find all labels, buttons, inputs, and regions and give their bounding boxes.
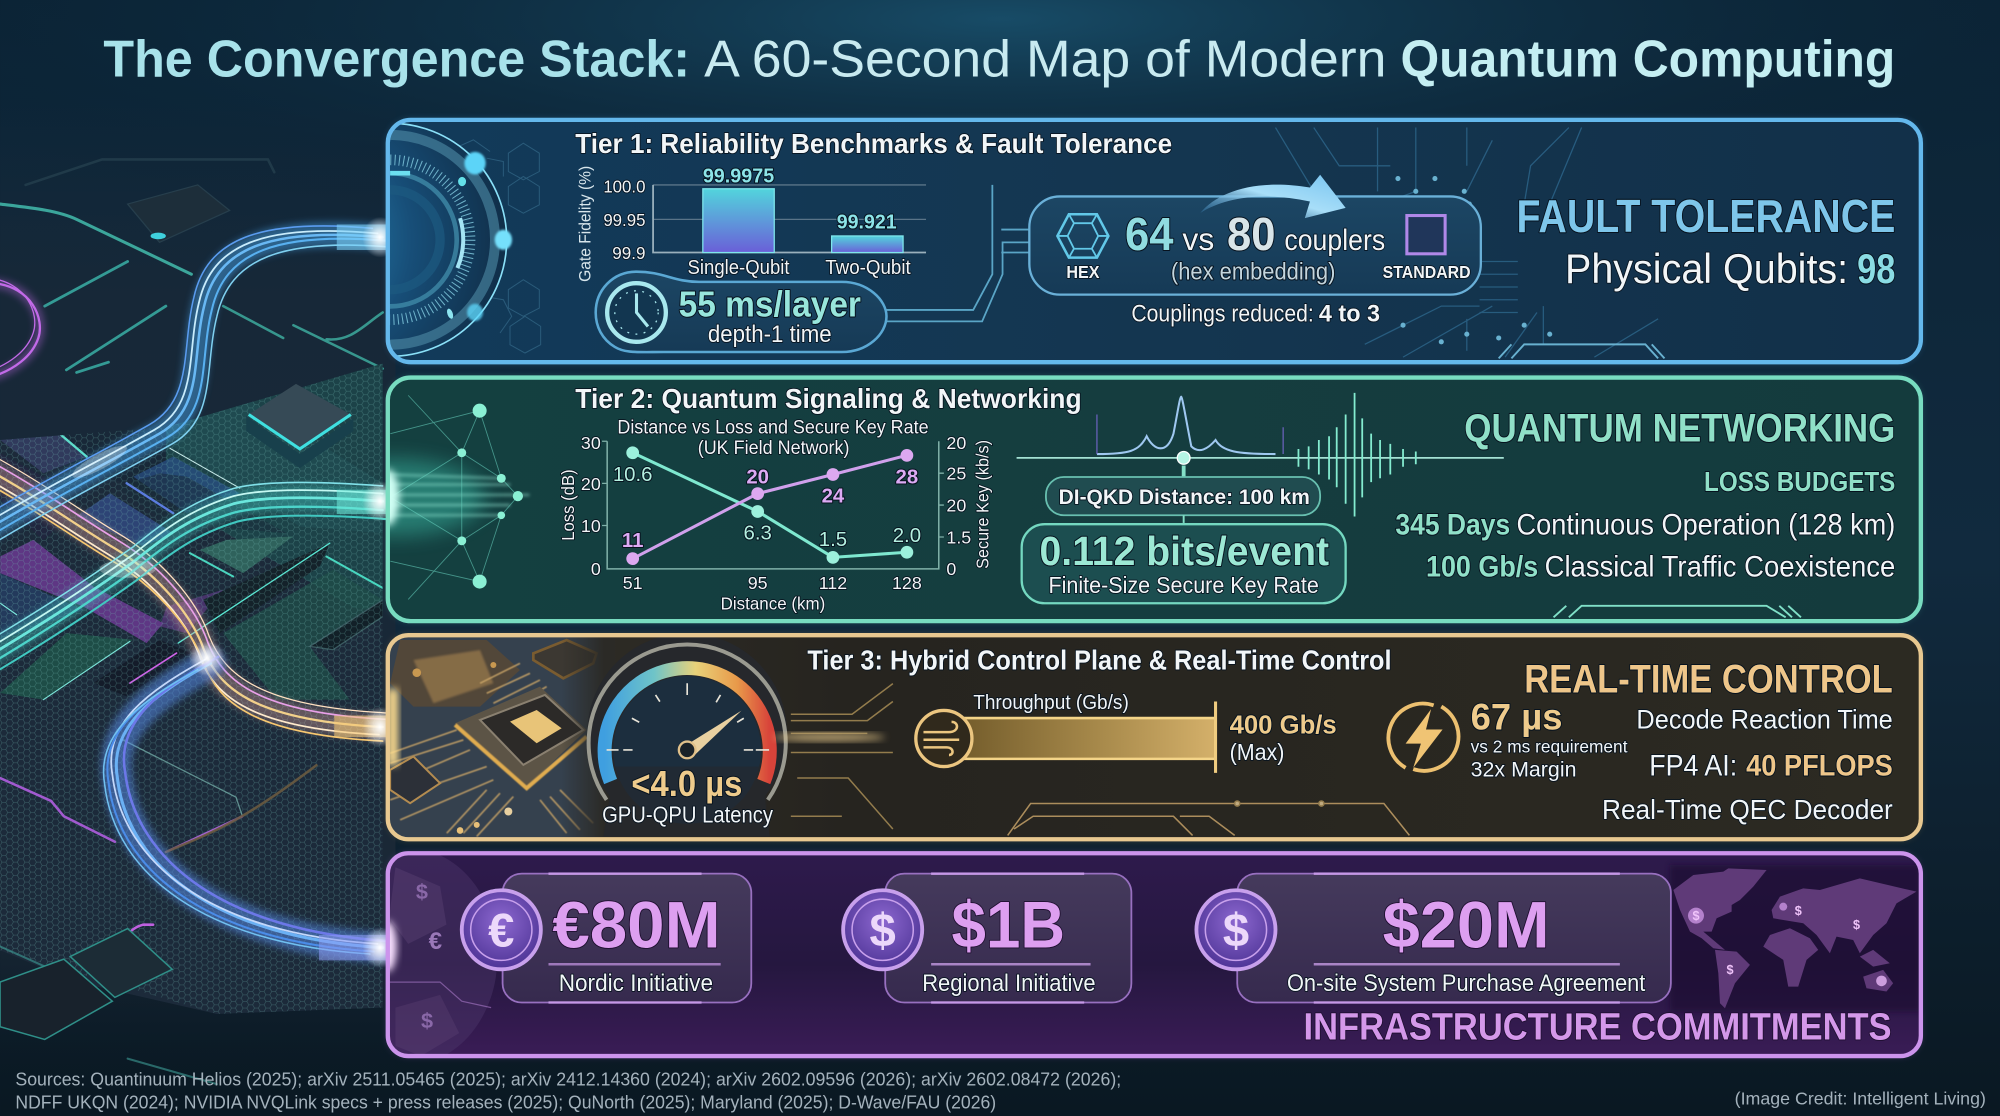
icon: hex lattice (1057, 214, 1108, 258)
chip illustration (390, 637, 598, 838)
line chart: distance vs loss and key rate: Distance (km) (721, 594, 825, 614)
waveform (1017, 393, 1504, 517)
line chart: distance vs loss and key rate: 0 (946, 559, 956, 579)
circuit connectors (886, 185, 1029, 321)
heading: Tier 3: Hybrid Control Plane & Real-Time Control (807, 645, 1392, 676)
tier 3 label: Decode Reaction Time (1636, 704, 1893, 734)
callout: couplers comparison (1029, 175, 1481, 295)
circuit board illustration (0, 159, 383, 1084)
card: regional (843, 874, 1131, 1002)
title: Quantum Computing (1400, 31, 1895, 89)
sources footer (15, 1068, 1121, 1112)
bar chart: gate fidelity: Gate Fidelity (%) (576, 166, 595, 282)
line chart: distance vs loss and key rate (558, 418, 993, 614)
callout: couplers comparison: couplers (1284, 224, 1385, 257)
tier 1 label: 98 (1857, 245, 1895, 292)
tier 3 label: REAL-TIME CONTROL (1524, 658, 1893, 702)
icon: gauge (587, 633, 787, 836)
gauge readout (602, 764, 773, 828)
line chart: distance vs loss and key rate: 20 (946, 433, 966, 453)
card: on-site: $20M (1383, 889, 1550, 963)
bar chart: gate fidelity: Two-Qubit (825, 257, 911, 279)
icon: standard square (1407, 216, 1445, 254)
decorative traces (773, 684, 1409, 835)
line chart: distance vs loss and key rate: 0 (591, 559, 601, 579)
callout: layer time: 55 ms/layer (679, 284, 861, 324)
world map: $ (1692, 909, 1700, 923)
tier 3 label (1524, 658, 1893, 825)
fiber connector tubes (319, 217, 398, 968)
card: regional: $1B (952, 889, 1065, 963)
fiber: gold to tier 3 (0, 455, 388, 741)
tier 2 label: QUANTUM NETWORKING (1464, 406, 1895, 450)
couplings note: Couplings reduced: (1131, 300, 1314, 327)
tier 3 label: FP4 AI: (1649, 749, 1737, 782)
tier 2 label: Classical Traffic Coexistence (1545, 550, 1895, 583)
globe with currency marks: € (429, 928, 443, 955)
crossing highlights (69, 441, 225, 676)
world map: $ (1853, 918, 1860, 932)
hud rings (390, 123, 542, 357)
callout: DI-QKD distance (1046, 477, 1320, 515)
gauge readout: <4.0 µs (631, 764, 742, 804)
sources footer: NDFF UKQN (2024); NVIDIA NVQLink specs + press releases (2025); QuNorth (2025); Maryland (2025); D-Wave/FAU (2026) (15, 1091, 996, 1112)
decode reaction metric: 32x Margin (1471, 757, 1576, 782)
decode reaction metric (1388, 697, 1628, 782)
line chart: distance vs loss and key rate: Loss (dB) (558, 469, 578, 541)
icon: clock (607, 283, 666, 342)
callout: secure key rate (1022, 515, 1346, 603)
callout: couplers comparison: STANDARD (1383, 262, 1471, 282)
tier 1 label (1517, 190, 1895, 292)
line chart: distance vs loss and key rate: 112 (819, 573, 847, 593)
couplings note: 4 to 3 (1319, 300, 1380, 327)
callout: couplers comparison: 80 (1227, 208, 1275, 260)
bar chart: gate fidelity (576, 165, 926, 282)
line chart: distance vs loss and key rate: 10 (581, 516, 601, 536)
line chart: distance vs loss and key rate: 24 (822, 486, 845, 508)
line chart: distance vs loss and key rate: 128 (892, 573, 922, 593)
tier 2 label (1395, 406, 1895, 583)
globe with currency marks (390, 856, 496, 1054)
line chart: distance vs loss and key rate: 1.5 (946, 527, 971, 547)
fiber: blue violet to tier 4 (104, 657, 390, 954)
bar chart: gate fidelity: 99.921 (837, 211, 897, 233)
decode reaction metric: vs 2 ms requirement (1471, 737, 1628, 757)
icon: dollar coin (843, 890, 922, 969)
line chart: distance vs loss and key rate: 28 (896, 466, 918, 488)
throughput bar: (Max) (1230, 739, 1284, 765)
image credit: (Image Credit: Intelligent Living) (1735, 1089, 1986, 1109)
tier 3 label: Real-Time QEC Decoder (1602, 794, 1893, 825)
line chart: distance vs loss and key rate: (UK Field Network) (698, 438, 849, 459)
sources footer: Sources: Quantinuum Helios (2025); arXiv 2511.05465 (2025); arXiv 2412.14360 (2024); arXiv 2602.09596 (2026); arXiv 2602.08472 (2026); (15, 1068, 1121, 1089)
line chart: distance vs loss and key rate: 51 (623, 573, 643, 593)
callout: couplers comparison: (hex embedding) (1171, 258, 1335, 285)
heading: Tier 2: Quantum Signaling & Networking (575, 383, 1082, 414)
icon: dollar coin: $ (870, 904, 896, 957)
icon: dollar coin: $ (1223, 904, 1249, 957)
title: A 60-Second Map of Modern (704, 31, 1386, 89)
globe with currency marks: $ (421, 1008, 433, 1033)
line chart: distance vs loss and key rate: 25 (946, 464, 966, 484)
throughput bar: 400 Gb/s (1230, 711, 1337, 739)
card: on-site (1196, 874, 1671, 1002)
fiber bundles (0, 217, 398, 968)
upper board traces (0, 159, 383, 372)
tier 2 label: LOSS BUDGETS (1704, 466, 1895, 497)
bar chart: gate fidelity: 100.0 (603, 177, 645, 197)
card: nordic (462, 874, 751, 1002)
callout: couplers comparison: HEX (1066, 262, 1100, 282)
line chart: distance vs loss and key rate: 6.3 (743, 523, 772, 545)
callout: DI-QKD distance: DI-QKD Distance: 100 km (1059, 484, 1310, 509)
title: The Convergence Stack: (103, 31, 690, 89)
panel: tier 4 infrastructure commitments (319, 848, 1921, 1065)
fiber: purple loop (0, 278, 40, 376)
line chart: distance vs loss and key rate: 1.5 (819, 529, 847, 551)
tier 1 label: Physical Qubits: (1565, 245, 1848, 292)
tier 2 label: Continuous Operation (128 km) (1517, 508, 1895, 541)
line chart: distance vs loss and key rate: 95 (748, 573, 768, 593)
callout: secure key rate: 0.112 bits/event (1040, 528, 1329, 574)
gauge readout: GPU-QPU Latency (602, 802, 773, 828)
tier 4 label: INFRASTRUCTURE COMMITMENTS (1304, 1005, 1892, 1048)
line chart: distance vs loss and key rate: 20 (946, 495, 966, 515)
icon: euro coin: € (488, 904, 514, 957)
throughput bar: Throughput (Gb/s) (973, 692, 1129, 714)
card: on-site: On-site System Purchase Agreement (1287, 970, 1646, 997)
icon: dollar coin (1196, 890, 1275, 969)
chip (249, 384, 351, 449)
line chart: distance vs loss and key rate: 30 (581, 433, 601, 453)
line chart: distance vs loss and key rate: 20 (746, 466, 769, 488)
bar chart: gate fidelity: 99.95 (603, 210, 645, 230)
board panels mapped from the reference (0, 357, 383, 1020)
callout: layer time: depth-1 time (708, 321, 832, 348)
decode reaction metric: 67 µs (1471, 697, 1562, 738)
network graph (390, 395, 531, 600)
line chart: distance vs loss and key rate: 10.6 (613, 464, 653, 486)
tier 1 label: FAULT TOLERANCE (1517, 190, 1895, 242)
icon: airflow (916, 710, 972, 767)
bar chart: gate fidelity: Single-Qubit (688, 257, 790, 279)
line chart: distance vs loss and key rate: 2.0 (893, 525, 921, 547)
panel: tier 2 quantum networking (306, 378, 1921, 621)
fiber: blue to tier 1 (0, 226, 395, 540)
world map (1670, 865, 1920, 1012)
arrow: hex to standard (1200, 175, 1346, 218)
card: regional: Regional Initiative (922, 970, 1096, 997)
card: nordic: Nordic Initiative (559, 970, 713, 997)
world map: $ (1726, 963, 1733, 977)
tier 2 label: 345 Days (1395, 508, 1510, 541)
globe with currency marks: $ (416, 879, 428, 904)
callout: couplers comparison: vs (1182, 221, 1214, 257)
icon: lightning bolt (1388, 704, 1458, 771)
card: nordic: €80M (552, 889, 721, 963)
line chart: distance vs loss and key rate: Distance vs Loss and Secure Key Rate (617, 418, 929, 439)
icon: euro coin (462, 890, 541, 969)
circuit traces (1275, 128, 1664, 358)
fiber: teal to tier 2 (0, 482, 387, 675)
bar chart: gate fidelity: 99.9975 (703, 165, 774, 187)
tier 3 label: 40 PFLOPS (1746, 749, 1893, 782)
tier 2 label: 100 Gb/s (1426, 550, 1538, 583)
line chart: distance vs loss and key rate: Secure Key (kb/s) (973, 440, 993, 569)
callout: couplers comparison: 64 (1125, 208, 1174, 260)
panel: tier 3 real-time control (380, 633, 1921, 846)
callout: secure key rate: Finite-Size Secure Key Rate (1048, 572, 1319, 598)
panel: tier 1 fault tolerance (274, 120, 1921, 362)
line chart: distance vs loss and key rate: 11 (622, 530, 643, 552)
world map: $ (1795, 904, 1802, 918)
bar chart: gate fidelity: 99.9 (612, 243, 645, 263)
title (103, 31, 1895, 89)
line chart: distance vs loss and key rate: 20 (581, 474, 601, 494)
throughput bar (916, 692, 1337, 773)
heading: Tier 1: Reliability Benchmarks & Fault Tolerance (575, 128, 1172, 159)
callout: layer time (596, 272, 886, 352)
